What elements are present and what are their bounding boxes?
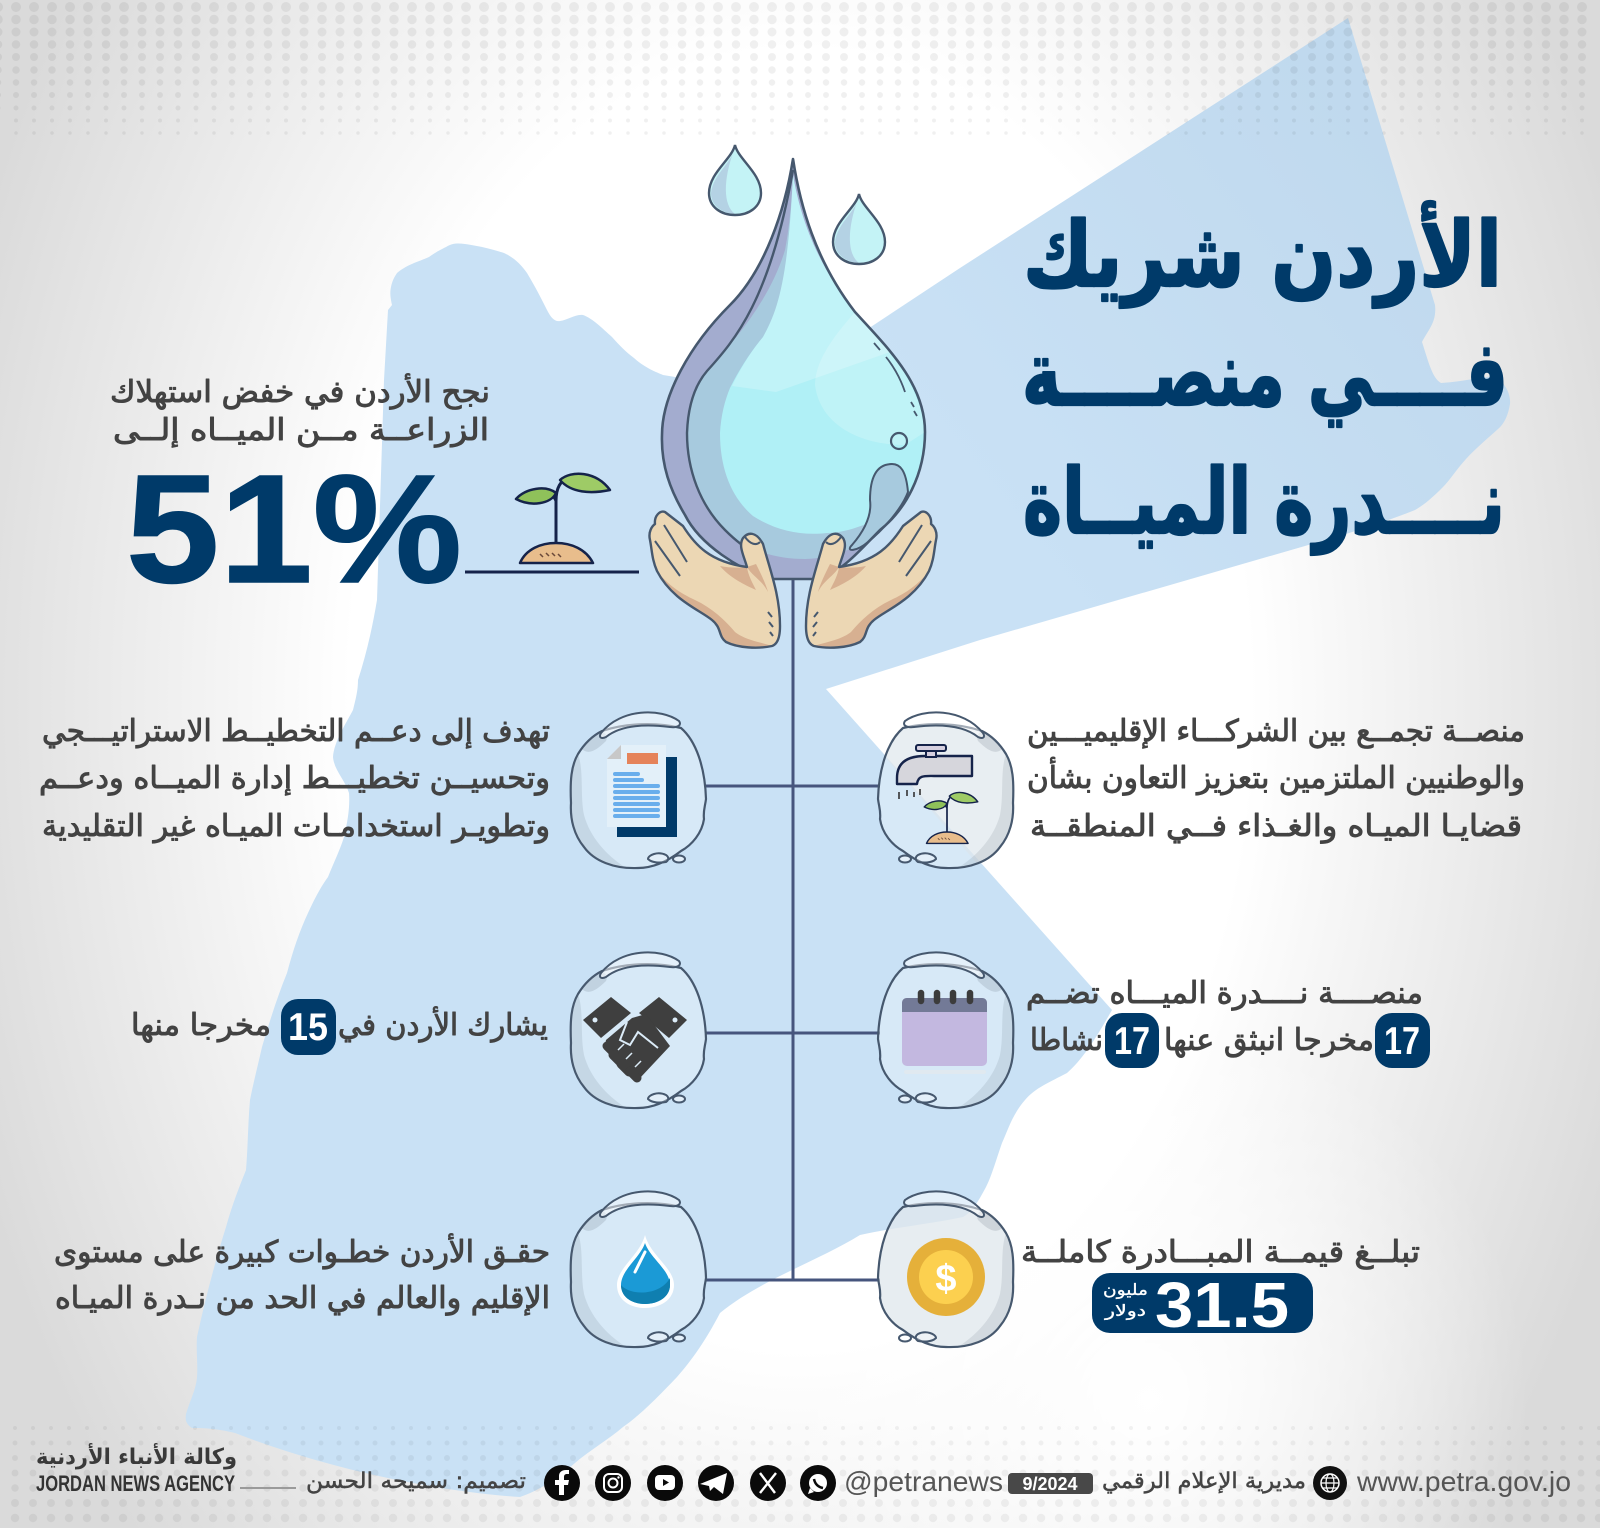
connector lines [705,575,880,1281]
text: وتحسيــن تخطيـــط إدارة الميــاه ودعــم [39,761,550,796]
text line: تبلــغ قيمــة المبـــادرة كاملــة [1021,1235,1420,1270]
item: 17 outputs (middle right) [878,952,1430,1108]
bubble icon: coin [878,1191,1013,1347]
value pill: 31.5: 31.5 [1155,1269,1289,1341]
icon: seedling [516,474,610,563]
big drop [662,159,925,579]
directorate: مديرية الإعلام الرقمي [1102,1469,1306,1494]
bubble icon: document [571,712,706,868]
footer [36,1442,1571,1501]
text: والوطنيين الملتزمين بتعزيز التعاون بشأن [1027,756,1525,796]
item: platform partners (top right) [878,712,1525,868]
text segment: مخرجا انبثق عنها [1164,1023,1374,1058]
date pill: 9/2024 [1022,1474,1078,1494]
icon: telegram [698,1465,734,1501]
stat number: 51% [126,443,462,615]
dot pattern: top [0,7,1600,133]
text [1027,714,1525,844]
stat: 51 percent [110,372,639,615]
text segment: مخرجا منها [131,1008,271,1043]
item: strategic planning (top left) [39,712,706,868]
date pill [1008,1473,1093,1494]
text: حقـق الأردن خطـوات كبيرة على مستوى [54,1232,550,1270]
agency logo text: وكالة الأنباء الأردنية [36,1442,237,1470]
agency logo text: JORDAN NEWS AGENCY [36,1471,235,1496]
title: الأردن شريك [1023,201,1502,308]
icon: globe [1313,1466,1347,1500]
left hand [649,512,780,648]
item: 15 outputs (middle left) [131,952,706,1108]
icon: facebook [544,1465,580,1501]
value pill: 31.5: مليون [1103,1280,1148,1300]
text: منصــة تجمــع بين الشركـــاء الإقليميـــين [1027,714,1525,749]
stat text: الزراعــة مــن الميــاه إلــى [113,413,489,448]
value pill: 31.5: دولار [1104,1301,1146,1321]
value pill: 31.5 [1092,1269,1313,1341]
pill: 15: 15 [288,1006,328,1049]
icon: X [750,1465,786,1501]
title [1022,201,1508,555]
bubble icon: water drop [571,1191,706,1347]
text [54,1232,550,1316]
pill: 17 second [1105,1013,1159,1068]
icon: whatsapp [800,1465,836,1501]
text line: منصــــة نــــدرة الميـــاه تضــم [1026,976,1423,1011]
text: وتطويـر استخدامـات الميـاه غير التقليدية [42,809,550,844]
item: achievements (bottom left) [54,1191,706,1347]
stat text [110,372,490,448]
pill: 15 [281,999,336,1055]
designer credit: تصميم: سميحه الحسن [306,1469,526,1494]
text segment: يشارك الأردن في [338,1005,548,1043]
text: الإقليم والعالم في الحد من نـدرة الميـاه [55,1281,550,1316]
bubble icon: coin: $ [935,1258,957,1300]
underline [465,570,639,574]
small drop left [709,145,761,215]
text [39,714,550,844]
pill: 17 second: 17 [1114,1020,1150,1063]
pill: 17: 17 [1384,1020,1420,1063]
icon: youtube [647,1465,683,1501]
bubble icon: faucet and seedling [878,712,1013,868]
website: www.petra.gov.jo [1356,1466,1571,1497]
agency logo text [36,1442,237,1496]
item: initiative value (bottom right) [878,1191,1420,1347]
text: تهدف إلى دعــم التخطيــط الاستراتيـــجي [42,714,550,749]
text: قضايـا الميـاه والغـذاء فــي المنطقــة [1030,809,1522,844]
bubble icon: calendar [878,952,1013,1108]
stat text: نجح الأردن في خفض استهلاك [110,372,490,410]
pill: 17 [1375,1013,1430,1068]
bubble icon: handshake [571,952,706,1108]
dot pattern: footer [15,1428,1600,1518]
illustration: water drop in hands [649,145,937,648]
small drop right [833,194,885,264]
handle: @petranews [844,1466,1003,1497]
text segment: نشاطا [1030,1023,1103,1058]
icon: instagram [595,1465,631,1501]
right hand [806,512,937,648]
social icons [544,1465,836,1501]
